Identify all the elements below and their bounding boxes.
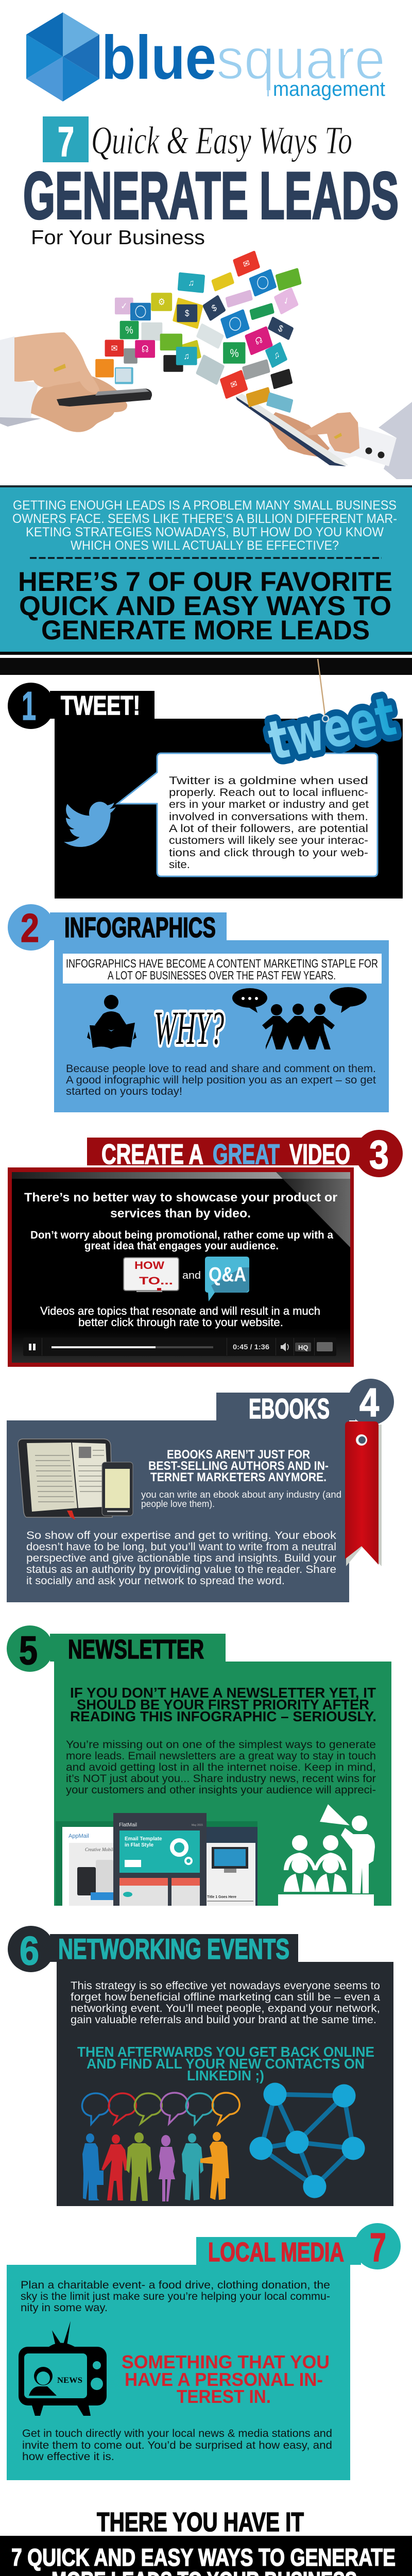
section 5 number badge and heading: 5 [19,1628,38,1673]
icon: red bookmark ribbon [345,1421,382,1566]
logo wordmark [101,23,385,100]
closing heading: THERE YOU HAVE IT [97,2507,304,2537]
body text: This strategy is so effective yet nowadays everyone seems to [71,1980,380,1992]
video text: There’s no better way to showcase your product or [24,1191,337,1205]
body text: Plan a charitable event- a food drive, clothing donation, the [21,2279,330,2291]
section 4 number badge and heading: EBOOKS [249,1393,330,1425]
section 7 number badge and heading: 7 [370,2225,386,2270]
body text: it socially and ask your network to spread the word. [26,1575,285,1587]
video text [24,1191,337,1252]
body text: Because people love to read and share and comment on them. [66,1063,376,1075]
video player controls: 0:45 / 1:36 [233,1343,269,1351]
title [23,116,399,249]
icon: why? hand lettering: WHY? [154,1002,224,1054]
panel: 6 networking events [8,1926,393,2206]
body text: You’re missing out on one of the simplest ways to generate [66,1739,376,1751]
callout: speech bubble: Twitter is a goldmine when used [169,775,368,787]
ebooks heading text: EBOOKS AREN’T JUST FOR [167,1448,310,1462]
icon: ebook tablet and phone [18,1439,133,1520]
intro text: KETING STRATEGIES NOWADAYS, BUT HOW DO YOU KNOW [26,525,384,539]
newsletter statement: IF YOU DON’T HAVE A NEWSLETTER YET, IT [70,1685,376,1701]
section 5 number badge and heading [7,1625,226,1673]
hero illustration: floating app icons: ♫ [272,349,281,361]
icon: news television: NEWS [57,2376,82,2385]
callout: speech bubble: A lot of their followers, are potential [169,823,368,835]
video player controls [23,1337,336,1356]
center template: FlatMail: May 2015 [192,1824,203,1827]
icon: why? hand lettering [154,1002,224,1054]
hero illustration: floating app icons: ✉ [229,378,238,391]
body text [22,2428,332,2463]
body text [26,1530,337,1587]
icon: how-to whiteboard [124,1258,179,1292]
section 2 number badge and heading: 2 [21,905,39,951]
hero illustration: floating app icons: ♫ [188,277,195,288]
right template [207,1827,258,1906]
hero illustration: floating app icons: $ [210,302,218,314]
intro heading [18,567,392,646]
hero illustration: left hand with phone [0,332,152,432]
center template: FlatMail: Email Template [125,1836,162,1842]
callout: white statement box [63,954,382,984]
intro heading: GENERATE MORE LEADS [41,615,370,646]
local media red statement: SOMETHING THAT YOU [122,2351,330,2372]
badge: number 7 [43,116,89,165]
video closing text: Videos are topics that resonate and will result in a much [40,1304,320,1317]
logo wordmark: blue [101,23,216,92]
video text: great idea that engages your audience. [84,1240,279,1252]
panel: 7 local media [7,2223,401,2480]
panel: 4 ebooks [7,1379,394,1602]
hero illustration: floating app icons: $ [277,323,284,334]
newsletter statement: SHOULD BE YOUR FIRST PRIORITY AFTER [77,1697,369,1713]
section 5 number badge and heading: NEWSLETTER [68,1635,204,1665]
body text [66,1739,376,1796]
icon: why? hand lettering: WHY? [154,1002,224,1054]
intro text: WHICH ONES WILL ACTUALLY BE EFFECTIVE? [71,538,339,553]
body text: it’s NOT just about you... Share industry news, recent wins for [66,1773,376,1785]
section 3 number badge and heading: VIDEO [289,1138,350,1170]
body text [21,2279,330,2314]
body text: doesn’t have to be long, but you’ll want to write from a neutral [26,1541,336,1553]
left template: AppMail: Creative Mobile [85,1847,115,1852]
section 3 number badge and heading: GREAT [213,1138,280,1170]
section 1 number badge and heading [8,683,154,729]
video text: services than by video. [110,1207,251,1221]
hero illustration: floating app icons: ✓ [121,301,127,312]
section 6 number badge and heading: 6 [20,1928,39,1973]
hero illustration: floating app icons: % [230,347,239,360]
icon: Q&A speech bubble: Q&A [209,1263,246,1286]
ebooks note text [141,1489,341,1509]
networking teal statement: LINKEDIN ;) [187,2067,264,2083]
callout: speech bubble [117,753,377,876]
ebooks heading text: TERNET MARKETERS ANYMORE. [150,1470,327,1484]
body text [66,1063,376,1097]
intro text [12,498,397,553]
video player controls: HQ [298,1344,308,1351]
panel: intro [0,485,412,655]
section 1 number badge and heading: 1 [22,683,36,728]
hero illustration: floating app icons: % [125,324,133,336]
hero illustration: floating app icons: ⚙ [158,297,165,307]
body text [71,1980,380,2026]
callout: speech bubble: site. [169,859,190,871]
panel: 1 tweet [8,659,403,899]
newsletter statement [70,1685,376,1724]
video player frame [8,1167,354,1367]
logo: bluesquare management (top) [26,12,385,101]
callout: white statement box: A LOT OF BUSINESSES OVER THE PAST FEW YEARS. [108,969,336,982]
email template mockups [56,1813,258,1906]
section 3 number badge and heading: CREATE A [101,1138,203,1170]
local media red statement [122,2351,330,2407]
hero illustration: right hand with tablet [236,394,412,479]
icon: colored speech bubbles [82,2093,239,2124]
hero illustration: floating app icons: ♫ [184,351,190,361]
icon: three connected people with speech bubbles [232,987,367,1049]
icon: presenter with megaphone and audience [278,1804,375,1906]
title sub line: For Your Business [31,227,205,249]
left template: AppMail [62,1827,115,1906]
panel: 2 infographics [8,904,389,1112]
body text: how effective it is. [22,2451,114,2463]
hero illustration: floating app icons: ✓ [282,295,291,308]
callout: speech bubble: involved in conversations with them. [169,811,368,823]
section 4 number badge and heading: 4 [359,1380,379,1425]
right template: Title 1 Goes Here [207,1895,236,1899]
section 6 number badge and heading [8,1926,298,1973]
hero illustration: floating app icons [95,250,302,413]
body text: A good infographic will help position you as an expert – so get [66,1074,376,1086]
intro heading: HERE’S 7 OF OUR FAVORITE [18,567,392,597]
newsletter statement: READING THIS INFOGRAPHIC – SERIOUSLY. [70,1708,376,1724]
logo wordmark: management [273,78,385,100]
icon: business people silhouettes [82,2132,229,2201]
ebooks note text: people love them). [141,1499,215,1509]
callout: speech bubble: ers in your market or industry and get [169,799,369,810]
section 3 number badge and heading [87,1130,403,1177]
logo wordmark: square [216,27,385,91]
center template: FlatMail: in Flat Style [125,1842,154,1848]
local media red statement: HAVE A PERSONAL IN- [125,2369,323,2390]
body text: So show off your expertise and get to writing. Your ebook [26,1530,337,1541]
left template: AppMail: AppMail [68,1833,89,1839]
icon: news television [19,2321,107,2416]
icon: how-to whiteboard: TO... [139,1275,173,1287]
body text: your customers and other insights your audience will appreci- [66,1784,376,1796]
body text: perspective and give actionable tips and insights. Build your [26,1552,336,1564]
body text: started on yours today! [66,1086,182,1097]
icon: twitter bird [64,802,116,847]
section 7 number badge and heading: LOCAL MEDIA [208,2238,344,2267]
icon: person reading book [87,995,136,1049]
body text: gain valuable referrals and build your brand at the same time. [71,2014,376,2026]
section 2 number badge and heading: INFOGRAPHICS [64,911,216,943]
center template: FlatMail: FlatMail [119,1822,137,1828]
body text: sky is the limit just make sure you’re helping your local commu- [21,2291,330,2302]
ebooks heading text: BEST-SELLING AUTHORS AND IN- [148,1459,329,1473]
intro text: GETTING ENOUGH LEADS IS A PROBLEM MANY SMALL BUSINESS [13,498,397,513]
hero illustration: floating app icons: ☊ [142,344,149,354]
ebooks heading text [148,1448,329,1484]
icon: blue hexagon cube [26,12,99,101]
closing banner [0,2536,412,2576]
networking teal statement: THEN AFTERWARDS YOU GET BACK ONLINE [77,2044,374,2060]
icon: how-to whiteboard: HOW [134,1260,164,1272]
chart: network node graph [249,2082,365,2198]
and label: and [182,1270,201,1281]
video text: Don’t worry about being promotional, rather come up with a [30,1229,333,1241]
video closing text [40,1304,320,1329]
hero illustration: floating app icons: $ [185,308,190,318]
center template: FlatMail [113,1813,207,1906]
networking teal statement: AND FIND ALL YOUR NEW CONTACTS ON [87,2056,365,2072]
body text: and avoid getting lost in all the internet noise. Keep in mind, [66,1761,376,1773]
section 2 number badge and heading [8,904,227,951]
video closing text: better click through rate to your website. [78,1316,283,1329]
body text: networking event. You’ll meet people, expand your network, [71,2003,380,2014]
badge: number 7: 7 [58,118,74,165]
intro heading: QUICK AND EASY WAYS TO [19,591,391,621]
hero illustration: floating app icons: ✉ [242,258,251,270]
body text: more leads. Email newsletters are a great way to stay in touch [66,1750,376,1762]
icon: Q&A speech bubble [205,1257,249,1301]
ebooks note text: you can write an ebook about any industry (and [141,1489,341,1500]
callout: speech bubble: properly. Reach out to local influenc- [169,787,368,799]
callout: speech bubble: customers will likely see your interac- [169,835,368,846]
callout: speech bubble: tions and click through to your web- [169,847,368,859]
body text: status as an authority by providing value to the reader. Share [26,1564,336,1575]
divider bar [0,658,412,675]
section 6 number badge and heading: NETWORKING EVENTS [58,1933,289,1965]
local media red statement: TEREST IN. [177,2386,271,2407]
body text: Get in touch directly with your local news & media stations and [22,2428,332,2439]
hero illustration: floating app icons: ☊ [254,334,264,347]
section 7 number badge and heading [196,2223,401,2270]
section 3 number badge and heading: 3 [369,1132,389,1177]
section 1 number badge and heading: TWEET! [61,691,140,721]
networking teal statement [77,2044,374,2083]
body text: forget how beneficial offline marketing can still be – even a [71,1991,380,2003]
body text: nity in some way. [21,2302,108,2314]
section 4 number badge and heading [216,1379,394,1425]
panel: 5 newsletter [7,1625,391,1906]
hero illustration: floating app icons: ✉ [111,343,117,353]
panel: 3 create a great video [8,1130,403,1367]
body text: invite them to come out. You’d be surprised at how easy, and [22,2439,332,2451]
